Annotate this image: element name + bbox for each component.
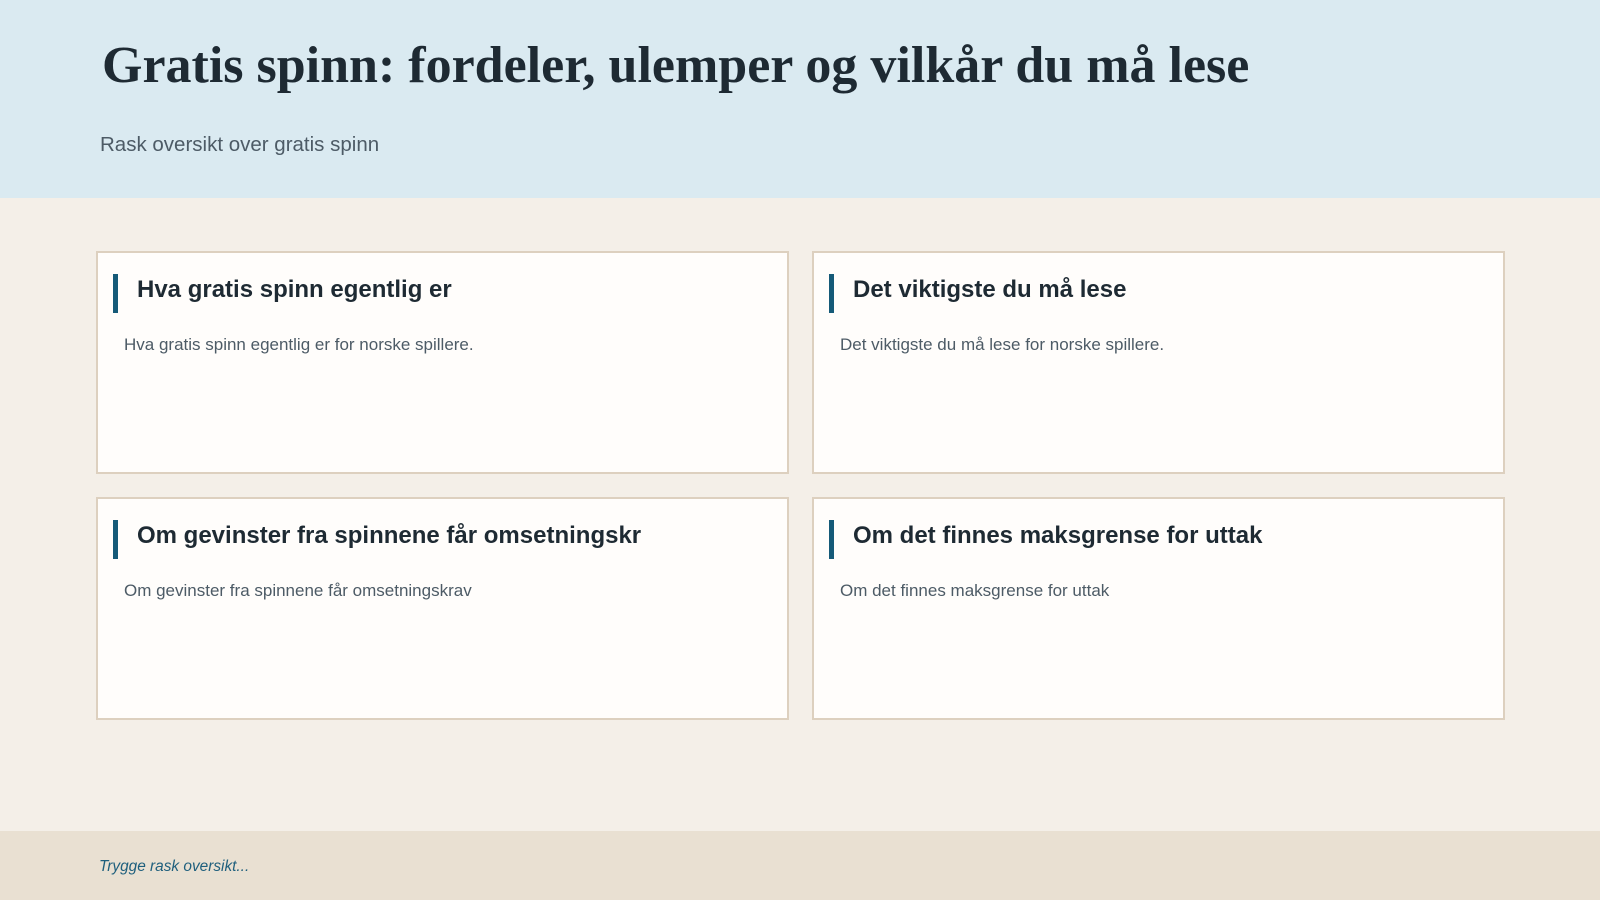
footer	[0, 831, 1600, 900]
footer text: Trygge rask oversikt...	[99, 858, 249, 875]
text block: Om det finnes maksgrense for uttak	[840, 581, 1109, 600]
accent bar	[829, 520, 834, 559]
text block: Det viktigste du må lese for norske spillere.	[840, 335, 1164, 354]
accent bar	[829, 274, 834, 313]
title: Gratis spinn: fordeler, ulemper og vilkår du må lese	[102, 37, 1249, 94]
accent bar	[113, 274, 118, 313]
heading: Hva gratis spinn egentlig er	[137, 276, 452, 303]
accent bar	[113, 520, 118, 559]
panel: what free spins are	[96, 251, 789, 474]
text block: Om gevinster fra spinnene får omsetningskrav	[124, 581, 472, 600]
panel: max withdrawal	[812, 497, 1505, 720]
subtitle: Rask oversikt over gratis spinn	[100, 133, 379, 156]
panel: most important to read	[812, 251, 1505, 474]
header band	[0, 0, 1600, 198]
heading: Det viktigste du må lese	[853, 276, 1126, 303]
text block: Hva gratis spinn egentlig er for norske spillere.	[124, 335, 474, 354]
panel: wagering	[96, 497, 789, 720]
heading: Om det finnes maksgrense for uttak	[853, 522, 1262, 549]
heading: Om gevinster fra spinnene får omsetningskr	[137, 522, 641, 549]
